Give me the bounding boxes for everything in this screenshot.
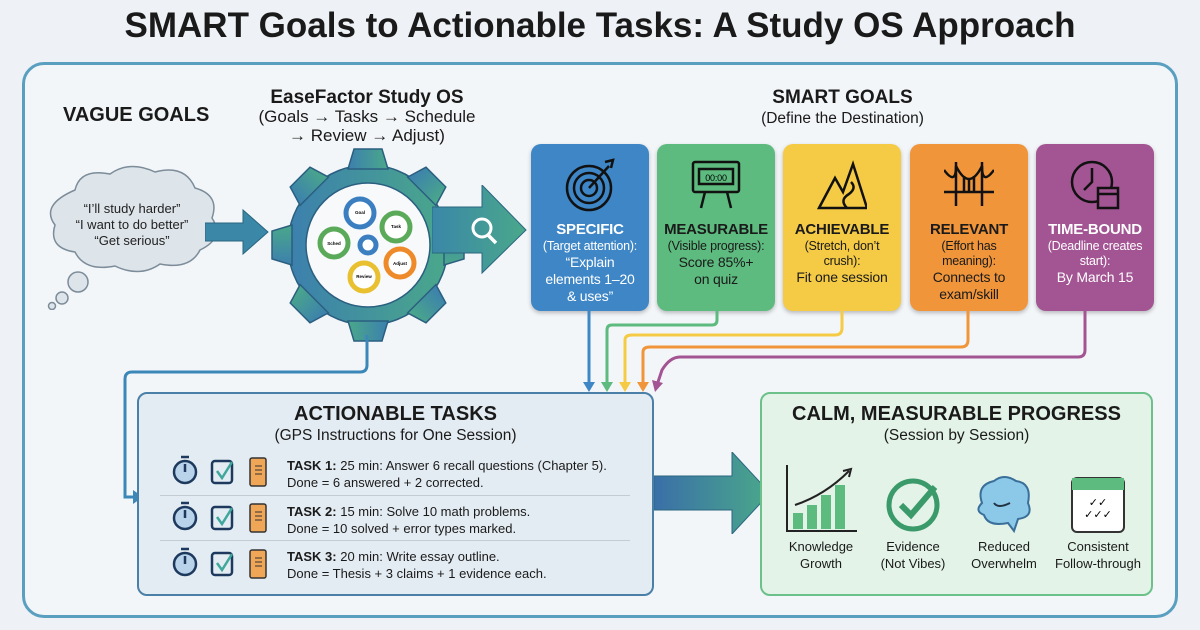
task 3: TASK 3: 20 min: Write essay outline. bbox=[287, 549, 500, 564]
card: specific: & uses” bbox=[567, 288, 613, 304]
cloud: vague goals: “I want to do better” bbox=[76, 217, 188, 232]
card: time-bound: By March 15 bbox=[1057, 269, 1133, 285]
text: Consistent bbox=[1067, 539, 1129, 554]
card: measurable: 00:00 bbox=[705, 173, 727, 183]
card: specific: elements 1–20 bbox=[545, 271, 635, 287]
icon: study OS gear: Task bbox=[391, 224, 401, 229]
card: relevant: meaning): bbox=[942, 254, 996, 268]
heading: actionable tasks: ACTIONABLE TASKS bbox=[294, 403, 497, 425]
card: relevant: Connects to bbox=[933, 269, 1005, 285]
arrow: tasks to progress bbox=[654, 452, 760, 534]
text: Evidence bbox=[886, 539, 940, 554]
icon: study OS gear: Review bbox=[356, 274, 372, 279]
card: measurable bbox=[657, 144, 775, 311]
heading: actionable tasks bbox=[274, 403, 517, 444]
arrows: SMART cards converge to tasks bbox=[583, 311, 1086, 392]
task 2: Done = 10 solved + error types marked. bbox=[287, 521, 516, 536]
text: Follow-through bbox=[1055, 556, 1141, 571]
card: relevant: exam/skill bbox=[939, 286, 999, 302]
text: Reduced bbox=[978, 539, 1030, 554]
card: relevant: (Effort has bbox=[941, 239, 997, 253]
icon: study OS gear: Adjust bbox=[393, 261, 408, 266]
title: SMART Goals to Actionable Tasks: A Study OS Approach bbox=[125, 6, 1075, 45]
progress labels: Knowledge bbox=[789, 539, 853, 554]
connector: gear to tasks bbox=[124, 335, 368, 504]
task 1: TASK 1: 25 min: Answer 6 recall questions (Chapter 5). bbox=[287, 458, 607, 473]
task 3: Done = Thesis + 3 claims + 1 evidence each. bbox=[287, 566, 547, 581]
task 1: Done = 6 answered + 2 corrected. bbox=[287, 475, 484, 490]
heading: actionable tasks: (GPS Instructions for One Session) bbox=[274, 427, 517, 444]
heading: SMART goals: (Define the Destination) bbox=[761, 110, 924, 127]
cloud: vague goals: “I’ll study harder” bbox=[84, 201, 180, 216]
progress labels: Growth bbox=[800, 556, 842, 571]
panel: calm measurable progress bbox=[760, 392, 1153, 596]
card: time-bound bbox=[1036, 144, 1154, 311]
dividers bbox=[160, 495, 630, 496]
icon: growth chart bbox=[786, 465, 857, 532]
heading: progress bbox=[792, 403, 1121, 444]
heading: EaseFactor Study OS: → Review → Adjust) bbox=[289, 126, 445, 145]
task rows icons bbox=[172, 456, 267, 579]
heading: SMART goals bbox=[761, 87, 924, 127]
task 2 bbox=[287, 504, 530, 536]
icon: calendar: ✓✓ bbox=[1089, 497, 1107, 509]
icon: calendar bbox=[1071, 477, 1125, 533]
icon: evidence check bbox=[886, 478, 940, 532]
icon: study OS gear bbox=[271, 148, 465, 342]
text: Overwhelm bbox=[971, 556, 1037, 571]
card: specific: SPECIFIC bbox=[556, 221, 624, 238]
progress labels bbox=[789, 539, 853, 571]
heading: vague goals: VAGUE GOALS bbox=[63, 104, 209, 126]
heading: EaseFactor Study OS bbox=[258, 87, 476, 145]
text: (Not Vibes) bbox=[881, 556, 945, 571]
cloud: vague goals bbox=[48, 166, 216, 310]
card: achievable: Fit one session bbox=[796, 269, 888, 285]
card: specific: “Explain bbox=[566, 254, 614, 270]
panel: actionable tasks bbox=[137, 392, 654, 596]
task 3 bbox=[287, 549, 547, 581]
icon: brain bbox=[977, 476, 1031, 533]
arrow: gear to SMART with magnifier bbox=[432, 185, 527, 274]
card: measurable: on quiz bbox=[694, 271, 738, 287]
card: time-bound: (Deadline creates bbox=[1048, 239, 1142, 253]
card: achievable: crush): bbox=[824, 254, 860, 268]
card: time-bound: start): bbox=[1080, 254, 1110, 268]
card: relevant bbox=[910, 144, 1028, 311]
icon: study OS gear: Sched bbox=[327, 241, 341, 246]
heading: SMART goals: SMART GOALS bbox=[772, 87, 913, 108]
card: specific bbox=[531, 144, 649, 311]
task 1 bbox=[287, 458, 607, 490]
heading: progress: CALM, MEASURABLE PROGRESS bbox=[792, 403, 1121, 425]
card: specific: (Target attention): bbox=[543, 239, 637, 253]
heading: progress: (Session by Session) bbox=[884, 427, 1029, 444]
card: achievable: ACHIEVABLE bbox=[795, 221, 889, 238]
card: measurable: (Visible progress): bbox=[668, 239, 764, 253]
icon: calendar: ✓✓✓ bbox=[1084, 509, 1112, 521]
card: achievable bbox=[783, 144, 901, 311]
card: measurable: Score 85%+ bbox=[679, 254, 753, 270]
heading: EaseFactor Study OS: (Goals → Tasks → Schedule bbox=[258, 107, 476, 126]
card: achievable: (Stretch, don’t bbox=[805, 239, 879, 253]
task 2: TASK 2: 15 min: Solve 10 math problems. bbox=[287, 504, 530, 519]
card: measurable: MEASURABLE bbox=[664, 221, 768, 238]
card: relevant: RELEVANT bbox=[930, 221, 1008, 238]
cloud: vague goals: “Get serious” bbox=[94, 233, 170, 248]
arrow: cloud to gear bbox=[205, 209, 269, 255]
icon: study OS gear: Goal bbox=[355, 210, 365, 215]
heading: EaseFactor Study OS: EaseFactor Study OS bbox=[270, 87, 464, 108]
card: time-bound: TIME-BOUND bbox=[1048, 221, 1142, 238]
